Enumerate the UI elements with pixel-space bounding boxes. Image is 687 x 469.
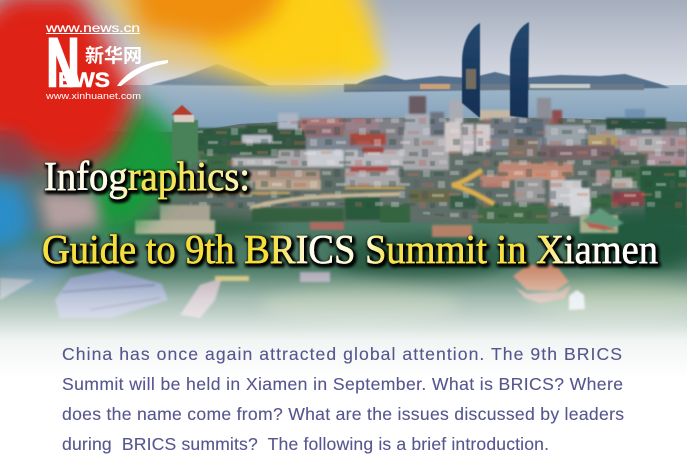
logo url bottom: www.xinhuanet.com [45,91,141,102]
introduction paragraph [62,344,624,454]
title line 1: Infographics: [44,153,250,199]
left pale blue temple roofs [55,270,168,318]
dark buildings under the red swirl [0,132,38,180]
line 2: Summit will be held in Xiamen in September. What is BRICS? Where [62,374,623,394]
pavilion orange roof [513,265,569,291]
pale buildings near blue swirl [38,192,100,232]
red swirl [0,0,132,168]
logo letter N: N [46,24,80,101]
bay water [0,85,687,135]
lit road and plaza [200,170,494,222]
logo EWS: EWS [58,69,110,92]
title line 2: Guide to 9th BRICS Summit in Xiamen [42,226,658,272]
line 3: does the name come from? What are the issues discussed by leaders [62,404,624,424]
land mass [0,118,687,385]
blue swirl [0,180,36,250]
logo swoosh [117,60,168,86]
lower hillside greenery [0,222,687,385]
line 1: China has once again attracted global attention. The 9th BRICS [62,344,622,364]
sky [0,0,687,92]
window and rooftop texture [190,118,687,225]
yellow swirl [200,0,372,82]
title [42,153,658,272]
colored swirl overlay [0,0,386,250]
left tower [462,23,480,118]
logo chinese name: 新华网 [85,45,142,67]
center rooftops [180,278,222,318]
logo: Xinhua News [45,23,168,102]
city buildings [196,96,687,235]
pale yellow halo joining red and orange [70,0,372,88]
right tower [510,22,529,118]
orange swirl [128,0,290,42]
logo url top: www.news.cn [45,23,140,35]
distant mountains [150,64,670,92]
twin towers [462,22,529,118]
old tower with red roof [171,105,198,162]
green swirl [88,100,188,232]
line 4: during BRICS summits? The following is a brief introduction. [62,434,549,454]
white fade to page background [0,268,687,378]
